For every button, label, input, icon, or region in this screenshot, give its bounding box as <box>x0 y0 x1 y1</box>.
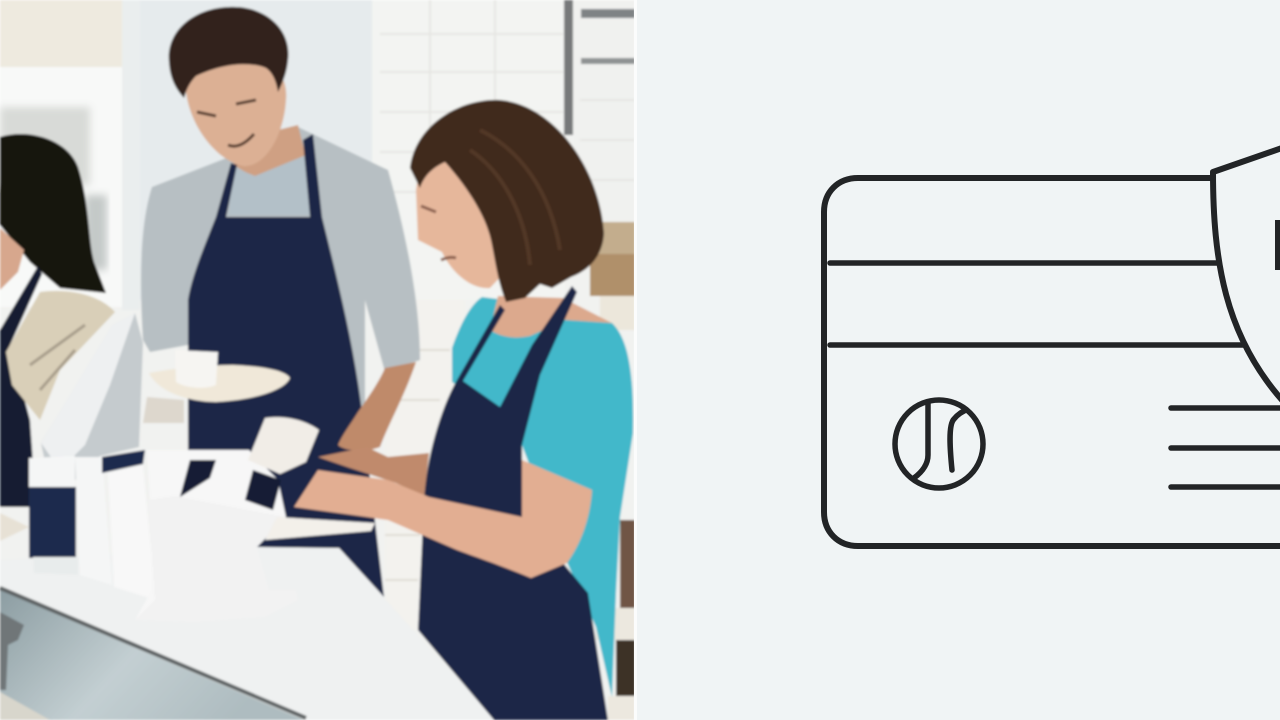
cup on plate held by woman <box>248 417 375 540</box>
shield lock mark <box>1275 220 1280 270</box>
folded napkin <box>41 313 143 485</box>
woman's front arm and hand <box>294 460 592 578</box>
man's hair <box>169 7 288 98</box>
counter <box>0 544 340 720</box>
man's tee <box>246 155 306 180</box>
woman's apron <box>418 286 608 720</box>
card stripe bottom line <box>830 342 1243 348</box>
woman's hair <box>410 100 604 302</box>
glass display <box>0 590 304 720</box>
detail lines <box>1171 408 1280 487</box>
man's face <box>186 56 286 166</box>
left woman's hair <box>0 134 106 293</box>
woman's teal shirt <box>452 297 633 697</box>
woman at left <box>0 134 115 541</box>
dark apron fragment <box>245 470 281 510</box>
napkin holder <box>29 313 156 600</box>
navy cylinder <box>29 487 76 558</box>
woman's face <box>416 158 505 288</box>
woman's eye and mouth <box>421 206 456 260</box>
man's eyes and smile <box>197 100 256 146</box>
woman's back forearm and hand <box>318 447 429 497</box>
man's apron <box>188 134 384 600</box>
white paper wrap <box>179 448 288 550</box>
panel: cafe photo <box>0 0 635 720</box>
woman's chest <box>490 296 612 337</box>
left woman's apron <box>0 266 42 507</box>
counter top <box>256 544 340 602</box>
man's shirt <box>141 127 420 420</box>
ball chip logo <box>895 400 983 488</box>
left woman's scarf <box>6 291 115 420</box>
card outline <box>824 178 1280 546</box>
card stripe top line <box>830 260 1218 266</box>
white sleeve <box>74 456 99 480</box>
chrome edge <box>0 588 306 718</box>
cup on plate held by man <box>143 350 290 423</box>
panel: card icon background <box>635 0 1280 720</box>
man's neck <box>234 125 306 178</box>
display contents <box>0 612 24 690</box>
left woman's face <box>0 228 24 290</box>
icon: credit card with shield <box>824 148 1280 546</box>
photo background wall <box>0 0 635 720</box>
man's forearm and hand <box>338 362 416 451</box>
woman in teal shirt <box>294 100 633 720</box>
man in grey shirt <box>141 7 420 600</box>
dark apron fragment <box>180 460 216 497</box>
left plate <box>0 513 29 541</box>
shield <box>1213 148 1280 400</box>
